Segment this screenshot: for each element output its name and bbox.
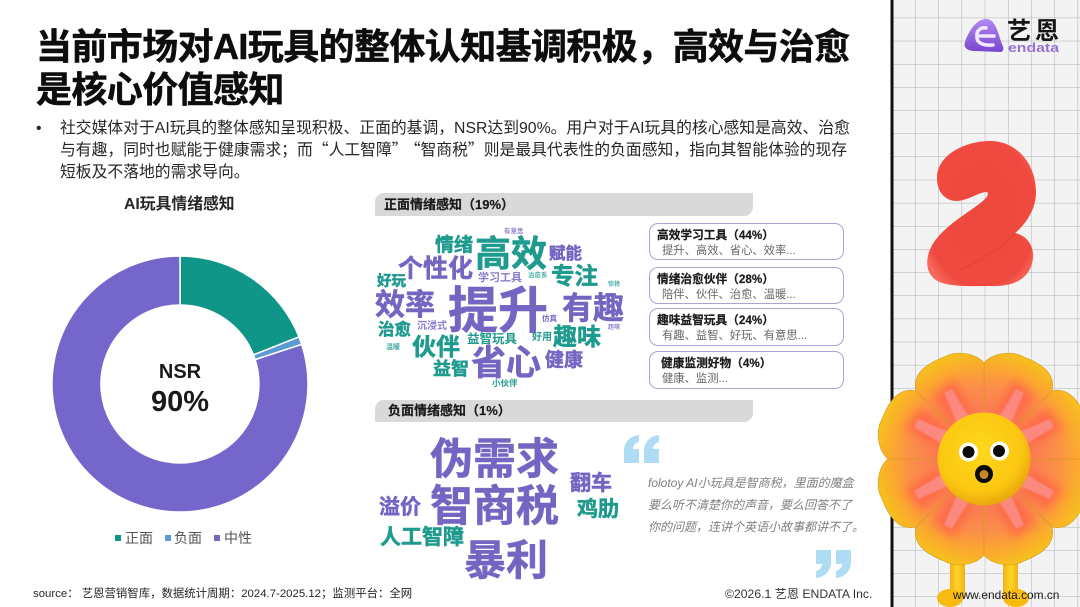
heading: positive sentiment: 正面情绪感知（19%） <box>384 197 514 212</box>
title <box>36 26 850 110</box>
negative word cloud: 翻车 <box>570 472 612 495</box>
positive word cloud: 高效 <box>475 233 547 274</box>
positive word cloud: 提升 <box>448 283 548 339</box>
positive word cloud: 有趣 <box>562 291 624 326</box>
summary text: 社交媒体对于AI玩具的整体感知呈现积极、正面的基调，NSR达到90%。用户对于AI玩具的核心感知是高效、治愈 <box>60 120 850 137</box>
negative word cloud: 人工智障 <box>380 526 464 549</box>
positive word cloud: 健康 <box>545 348 583 371</box>
negative word cloud: 暴利 <box>464 537 548 584</box>
chart legend: 正面 <box>125 530 153 546</box>
chart legend <box>115 530 252 546</box>
negative word cloud: 智商税 <box>430 483 559 531</box>
positive word cloud: 小伙伴 <box>492 378 518 388</box>
summary text: 与有趣，同时也赋能于健康需求；而“人工智障” “智商税”则是最具代表性的负面感知，指向其智能体验的现存 <box>60 137 847 160</box>
card: fun educational toy: 有趣、益智、好玩、有意思... <box>662 330 807 342</box>
positive word cloud: 好用 <box>532 331 552 343</box>
positive word cloud: 沉浸式 <box>417 319 447 332</box>
positive word cloud: 省心 <box>471 344 541 383</box>
positive word cloud: 趣味 <box>553 324 601 351</box>
card: efficient learning tool: 高效学习工具（44%） <box>657 229 774 242</box>
summary text: 短板及不落地的需求导向。 <box>60 164 250 181</box>
negative word cloud: 鸡肋 <box>577 498 619 521</box>
positive word cloud: 伙伴 <box>412 334 460 361</box>
icon: endata logo: endata <box>1008 40 1060 55</box>
source footnote: source： 艺恩营销智库，数据统计周期：2024.7-2025.12；监测平台：全网 <box>33 588 412 600</box>
card: emotional healing companion <box>649 267 844 304</box>
quote text: folotoy AI小玩具是智商税，里面的魔盒 <box>648 476 854 490</box>
title: 是核心价值感知 <box>36 69 284 110</box>
quote text: 你的问题，连讲个英语小故事都讲不了。 <box>648 520 864 534</box>
positive word cloud: 学习工具 <box>478 270 522 284</box>
card: efficient learning tool: 提升、高效、省心、效率... <box>662 245 796 257</box>
donut center label <box>151 361 209 418</box>
positive word cloud: 好玩 <box>377 273 406 290</box>
positive word cloud: 治愈 <box>378 319 412 339</box>
positive word cloud: 超萌 <box>608 323 620 331</box>
card: fun educational toy: 趣味益智玩具（24%） <box>657 314 774 327</box>
positive word cloud: 惊艳 <box>608 280 620 288</box>
positive word cloud: 仿真 <box>542 313 557 323</box>
donut chart title: AI玩具情绪感知 <box>124 196 235 213</box>
positive word cloud: 效率 <box>375 289 435 322</box>
card: health monitoring gadget: 健康监测好物（4%） <box>661 357 771 370</box>
copyright: ©2026.1 艺恩 ENDATA Inc. <box>725 587 872 601</box>
negative word cloud: 伪需求 <box>430 436 559 484</box>
quote text: 要么听不清楚你的声音，要么回答不了 <box>648 498 852 512</box>
positive word cloud: 益智 <box>433 358 469 379</box>
website url: www.endata.com.cn <box>953 588 1059 602</box>
summary text: • <box>36 120 42 137</box>
chart legend: 中性 <box>224 530 252 546</box>
positive word cloud: 有意思 <box>504 226 524 235</box>
positive word cloud: 专注 <box>551 263 598 289</box>
quote text <box>648 476 864 534</box>
card: emotional healing companion: 情绪治愈伙伴（28%） <box>657 273 774 286</box>
positive word cloud: 个性化 <box>398 255 473 283</box>
icon: endata logo: 艺恩 <box>1007 18 1063 45</box>
heading: positive sentiment <box>375 193 753 216</box>
positive word cloud: 赋能 <box>549 244 582 263</box>
summary text <box>36 119 850 181</box>
card: fun educational toy <box>649 308 844 346</box>
card: efficient learning tool <box>649 223 844 260</box>
chart legend: 负面 <box>174 530 202 546</box>
card: emotional healing companion: 陪伴、伙伴、治愈、温暖... <box>662 289 796 301</box>
heading: negative sentiment <box>375 400 753 422</box>
positive word cloud: 益智玩具 <box>467 331 518 346</box>
heading: negative sentiment: 负面情绪感知（1%） <box>388 403 511 418</box>
positive word cloud: 温暖 <box>386 342 400 351</box>
negative word cloud: 溢价 <box>379 496 421 519</box>
card: health monitoring gadget <box>649 351 844 389</box>
donut center label: NSR <box>159 361 201 383</box>
card: health monitoring gadget: 健康、监测... <box>662 373 728 385</box>
positive word cloud: 情绪 <box>435 234 473 256</box>
positive word cloud: 治愈系 <box>528 270 548 279</box>
donut center label: 90% <box>151 386 209 418</box>
title: 当前市场对AI玩具的整体认知基调积极，高效与治愈 <box>36 26 850 67</box>
